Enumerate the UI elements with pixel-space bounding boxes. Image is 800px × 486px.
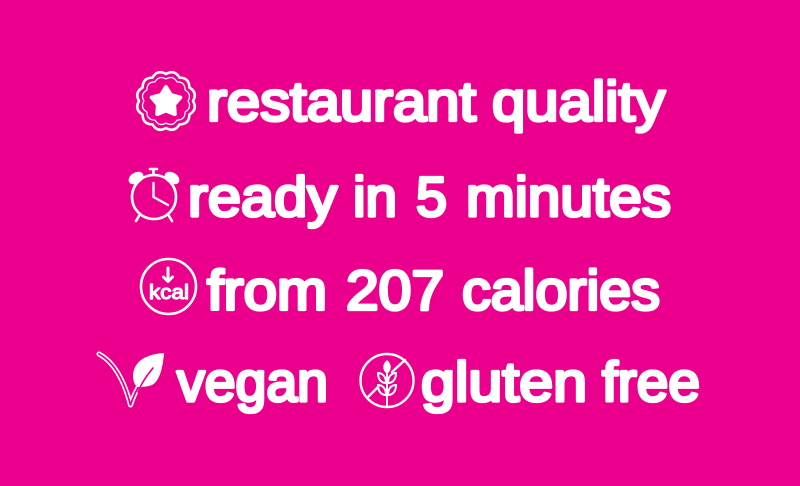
text: gluten free: free [602, 350, 700, 413]
text: ready in 5 minutes: in [353, 165, 397, 228]
icon: rosette star [137, 72, 195, 130]
text: restaurant quality: quality [492, 70, 665, 132]
text: ready in 5 minutes: minutes [466, 165, 671, 228]
text: vegan: vegan [177, 350, 328, 413]
text: gluten free [421, 350, 700, 413]
text: from 207 calories: from [207, 258, 327, 322]
icon: kcal: kcal [149, 282, 189, 304]
text: restaurant quality [207, 70, 665, 132]
icon: vegan leaf [99, 353, 164, 405]
text: from 207 calories: 207 [346, 258, 444, 322]
icon: kcal [141, 259, 196, 314]
text: ready in 5 minutes: 5 [416, 165, 447, 228]
text: from 207 calories: calories [462, 258, 660, 322]
text: from 207 calories [207, 258, 660, 322]
icon: alarm clock [126, 169, 182, 221]
text: ready in 5 minutes [188, 165, 671, 228]
text: ready in 5 minutes: ready [188, 165, 337, 228]
icon: gluten free [360, 354, 414, 407]
text: restaurant quality: restaurant [207, 70, 476, 132]
text: gluten free: gluten [421, 350, 587, 413]
